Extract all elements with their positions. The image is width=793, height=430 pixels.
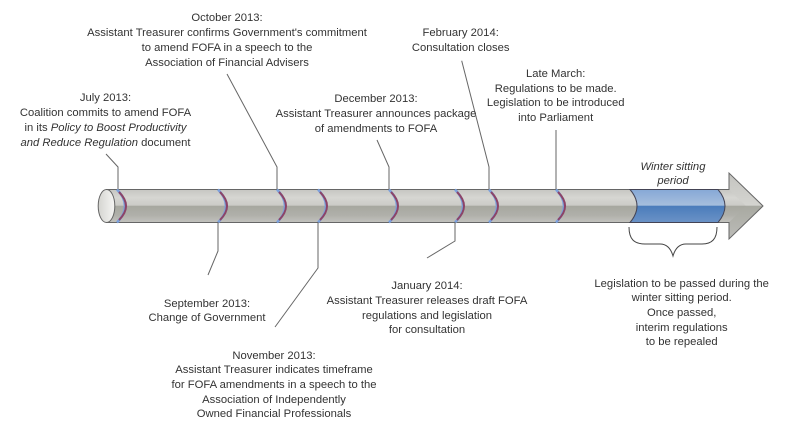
label: November 2013: Assistant Treasurer indicates timeframe xyxy=(175,364,373,376)
label: July 2013: and Reduce Regulation document xyxy=(20,136,191,148)
label: November 2013: Owned Financial Professionals xyxy=(197,408,351,420)
label: legislation passed xyxy=(594,278,769,348)
label: December 2013: December 2013: xyxy=(334,93,418,105)
label: January 2014: for consultation xyxy=(389,324,465,336)
label: October 2013: Association of Financial Advisers xyxy=(145,56,309,68)
label: September 2013: September 2013: xyxy=(164,298,250,310)
label: November 2013: for FOFA amendments in a speech to the xyxy=(171,379,377,391)
label: legislation passed: to be repealed xyxy=(646,336,718,348)
label: December 2013 xyxy=(276,93,476,135)
label: Late March xyxy=(487,68,624,124)
label: July 2013: in its Policy to Boost Productivity xyxy=(25,122,186,134)
label: Winter sitting period: period xyxy=(657,175,689,187)
label: October 2013 xyxy=(87,12,367,68)
date markers xyxy=(117,190,565,222)
label: Late March: into Parliament xyxy=(518,112,593,124)
label: September 2013: Change of Government xyxy=(149,312,265,324)
label: legislation passed: Legislation to be passed during the xyxy=(594,278,769,290)
label: September 2013 xyxy=(149,298,266,324)
label: October 2013: Assistant Treasurer confirms Government's commitment xyxy=(87,27,367,39)
label: January 2014: Assistant Treasurer releases draft FOFA xyxy=(327,295,527,307)
label: February 2014 xyxy=(412,27,510,54)
label: Late March: Regulations to be made. xyxy=(495,82,617,94)
label: July 2013: July 2013: xyxy=(80,92,131,104)
label: October 2013: October 2013: xyxy=(191,12,263,24)
label: October 2013: to amend FOFA in a speech to the xyxy=(142,42,312,54)
label: Winter sitting period: Winter sitting xyxy=(641,160,705,172)
label: January 2014 xyxy=(326,280,528,336)
label: November 2013 xyxy=(171,350,377,420)
label: December 2013: Assistant Treasurer announces package xyxy=(276,108,476,120)
label: July 2013 xyxy=(20,92,191,148)
label: December 2013: of amendments to FOFA xyxy=(315,123,437,135)
brace xyxy=(629,227,717,256)
label: February 2014: February 2014: xyxy=(423,27,499,39)
label: January 2014: January 2014: xyxy=(391,280,463,292)
arrow body xyxy=(106,173,763,239)
tube end xyxy=(98,190,115,222)
leader lines xyxy=(106,61,556,327)
label: legislation passed: Once passed, xyxy=(647,307,716,319)
label: November 2013: Association of Independently xyxy=(202,394,346,406)
label: February 2014: Consultation closes xyxy=(412,42,509,54)
label: legislation passed: interim regulations xyxy=(636,322,728,334)
label: Winter sitting period xyxy=(641,160,706,187)
winter sitting period band xyxy=(630,190,725,222)
label: Late March: Late March: xyxy=(526,68,585,80)
label: January 2014: regulations and legislation xyxy=(362,310,492,322)
label: Late March: Legislation to be introduced xyxy=(487,97,624,109)
timeline graphic xyxy=(98,60,764,328)
label: July 2013: Coalition commits to amend FOFA xyxy=(20,107,191,119)
label: legislation passed: winter sitting period. xyxy=(632,292,732,304)
label: November 2013: November 2013: xyxy=(232,350,316,362)
